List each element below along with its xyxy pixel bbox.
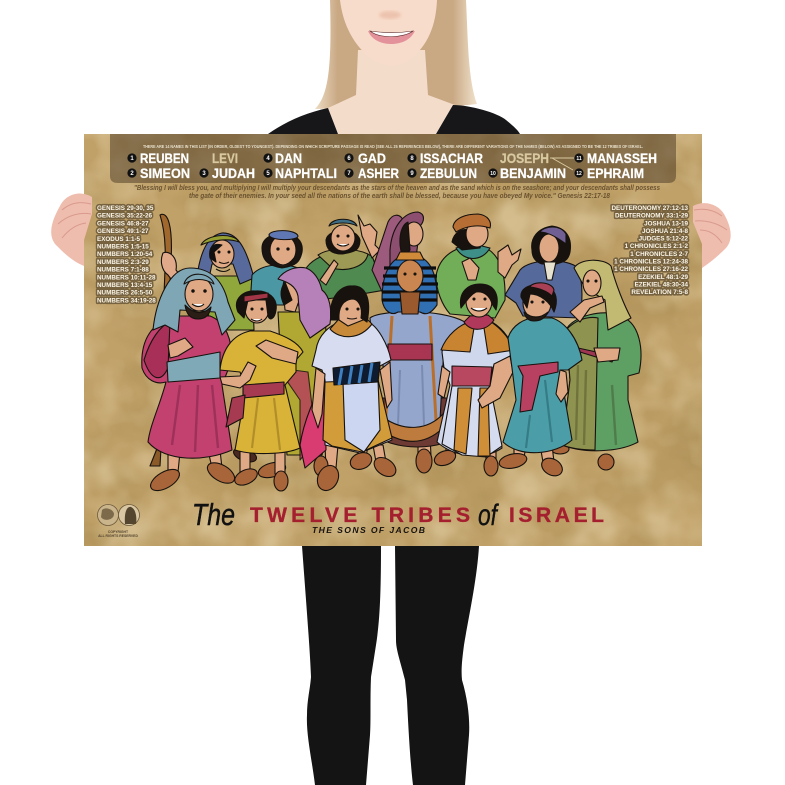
- badge numerals: 3: [202, 171, 206, 177]
- scripture references: left: GENESIS 46:8-27: [97, 220, 149, 227]
- model: woman holding poster: [268, 0, 520, 785]
- badge numerals: [130, 156, 582, 177]
- model right hand over poster edge: [693, 203, 731, 268]
- title word: of: of: [478, 499, 499, 532]
- poster background: [84, 134, 702, 546]
- tribe names: LEVI: [212, 151, 238, 166]
- publisher logos: ALL RIGHTS RESERVED: [98, 534, 138, 538]
- scripture references: right: EZEKIEL 48:30-34: [635, 281, 688, 288]
- badge numerals: 7: [347, 171, 351, 177]
- figure: back left man with staff: [150, 214, 254, 466]
- scripture references: right: REVELATION 7:5-8: [631, 289, 688, 296]
- scripture references: right: 1 CHRONICLES 2:1-2: [625, 243, 688, 250]
- figure: back man with blue cap: [250, 231, 304, 305]
- scripture references: left: NUMBERS 2:3-29: [97, 259, 149, 266]
- leggings right: [395, 546, 479, 785]
- badge numerals: 9: [410, 171, 414, 177]
- black top: [268, 105, 520, 134]
- figure: pink-draped man behind yellow boy: [232, 267, 331, 480]
- face: [340, 0, 437, 65]
- figure: boy with orange shoulders: [432, 284, 514, 476]
- badge numerals: 12: [576, 171, 582, 177]
- tribe names: ASHER: [358, 166, 399, 181]
- figure: green robed man on right: [551, 260, 641, 470]
- scripture references: right: [611, 205, 688, 296]
- tribe names: EPHRAIM: [587, 166, 644, 181]
- tribe names: ISSACHAR: [420, 151, 483, 166]
- scripture references: right: 1 CHRONICLES 12:24-38: [614, 258, 688, 266]
- tribe names: REUBEN: [140, 151, 189, 166]
- badge numerals: 10: [490, 171, 496, 177]
- scripture references: right: 1 CHRONICLES 27:16-22: [614, 266, 688, 273]
- scripture quote: [134, 185, 660, 200]
- figure: man in teal: [498, 283, 582, 479]
- publisher logos: [98, 504, 140, 538]
- scripture references: right: DEUTERONOMY 27:12-13: [611, 205, 688, 212]
- scripture references: left: NUMBERS 1:20-54: [97, 251, 153, 258]
- nose shadow: [379, 11, 401, 19]
- tribe names: JUDAH: [212, 166, 255, 181]
- scripture references: left: NUMBERS 1:5-15: [97, 244, 149, 250]
- leggings left: [302, 546, 381, 785]
- scripture references: left: NUMBERS 34:19-28: [97, 297, 156, 304]
- tribe names: SIMEON: [140, 166, 190, 181]
- model left hand over poster edge: [51, 194, 92, 266]
- title word: Israel: ISRAEL: [509, 504, 604, 527]
- tribe names: BENJAMIN: [500, 166, 566, 181]
- subtitle: THE SONS OF JACOB: [312, 525, 425, 535]
- scripture references: left: EXODUS 1:1-5: [97, 236, 141, 243]
- scripture references: left: GENESIS 35:22-26: [97, 213, 152, 220]
- scripture references: right: DEUTERONOMY 33:1-29: [615, 213, 688, 220]
- tribe names: ZEBULUN: [420, 166, 477, 181]
- scripture references: left: [97, 205, 156, 304]
- tribe names: GAD: [358, 151, 386, 166]
- tribe names: NAPHTALI: [275, 166, 337, 181]
- scripture quote: "Blessing I will bless you, and multiplying I will multiply your descendants as the stars of the heaven and as the sand which is on the seashore; and your descendants shall possess: [134, 185, 660, 192]
- tribe names: DAN: [275, 151, 302, 166]
- badge numerals: 4: [266, 156, 270, 162]
- badge numerals: 11: [576, 156, 582, 162]
- scripture references: right: JOSHUA 21:4-8: [642, 228, 688, 235]
- scripture references: left: GENESIS 29-30, 35: [97, 205, 154, 212]
- badge numerals: 5: [266, 171, 270, 177]
- figure: back man in green with raised finger: [305, 215, 385, 300]
- badge numerals: 8: [410, 156, 414, 162]
- number badges: [127, 153, 584, 178]
- figure: Reuben in pink: [142, 268, 238, 495]
- scripture references: right: JUDGES 5:12-22: [639, 236, 688, 243]
- figure: back man in green with orange turban: [436, 214, 521, 318]
- joseph connector: [550, 158, 574, 170]
- smile: [368, 31, 415, 44]
- scripture references: right: EZEKIEL 48:1-29: [638, 274, 688, 281]
- title words: Twelve Tribes: TWELVE TRIBES: [250, 504, 470, 527]
- figure: yellow boy: [220, 291, 303, 491]
- scripture references: left: NUMBERS 7:1-88: [97, 267, 149, 274]
- badge numerals: 1: [130, 156, 134, 162]
- scripture quote: the gate of their enemies. In your seed all the nations of the earth shall be blessed, because you have obeyed My voice." Genesis 22:17-18: [189, 193, 610, 200]
- hair: [315, 0, 477, 109]
- figure: back man in plum headcloth with raised arm: [372, 212, 424, 298]
- title: [192, 497, 604, 535]
- tribe names: MANASSEH: [587, 151, 657, 166]
- tribe names: [140, 151, 657, 181]
- scripture references: right: JOSHUA 13-19: [644, 220, 688, 227]
- badge numerals: 6: [347, 156, 351, 162]
- neck and chest: [328, 50, 455, 134]
- badge numerals: 2: [130, 171, 134, 177]
- tribe names: JOSEPH: [500, 151, 549, 166]
- scripture references: right: 1 CHRONICLES 2-7: [630, 251, 688, 258]
- scripture references: left: NUMBERS 10:11-28: [97, 274, 156, 281]
- figure: back man in slate blue: [505, 226, 582, 318]
- figure: Joseph as Egyptian official: [368, 252, 466, 473]
- scripture references: left: GENESIS 49:1-27: [97, 228, 149, 235]
- publisher logos: COPYRIGHT: [108, 530, 129, 534]
- figure: boy in white and gold tunic: [300, 286, 399, 494]
- scripture references: left: NUMBERS 26:5-50: [97, 290, 153, 297]
- intro note: THERE ARE 14 NAMES IN THIS LIST (IN ORDER, OLDEST TO YOUNGEST). DEPENDING ON WHICH SCRIPTURE PASSAGE IS READ (SEE ALL 25 REFERENCES BELOW), THERE ARE DIFFERENT VARIATIONS OF THE NAMES (BELOW) AS ASSIGNED TO BE THE 12 TRIBES OF ISRAEL.: [143, 144, 643, 149]
- title word: The: The: [192, 497, 235, 532]
- header panel: names of the tribes: [110, 134, 676, 183]
- scripture references: left: NUMBERS 13:4-15: [97, 282, 153, 289]
- illustration: twelve sons of Jacob and Pharaoh-garbed Joseph: [142, 212, 641, 495]
